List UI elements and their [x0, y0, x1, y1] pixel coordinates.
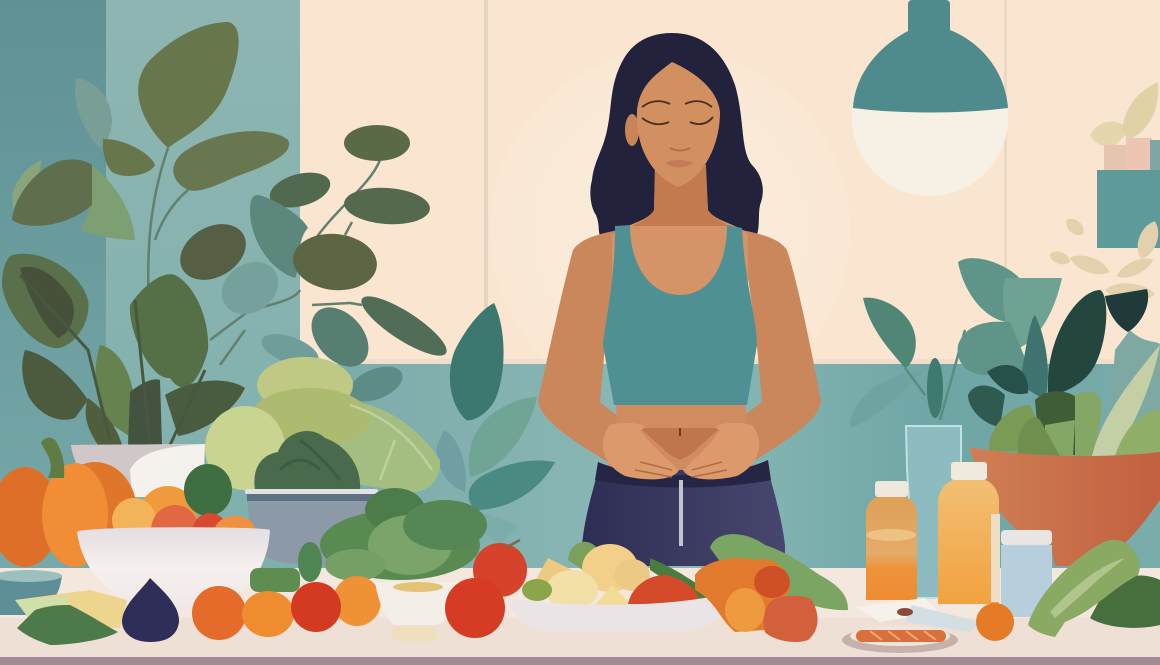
- plant: right foliage: [850, 258, 1160, 566]
- woman: [538, 33, 821, 566]
- small bowl: [375, 582, 462, 641]
- face: [637, 62, 720, 187]
- grey pot with broccoli: [245, 431, 378, 565]
- big olive leaf: [138, 22, 239, 148]
- leggings: [582, 470, 785, 566]
- pot: white with greens: [71, 444, 205, 497]
- small teal cup: [0, 570, 62, 615]
- hands: [603, 423, 679, 479]
- center greens: [250, 488, 487, 592]
- pumpkin: [0, 438, 137, 567]
- left olive leaf: [12, 159, 92, 226]
- bottle: small orange jar: [866, 481, 917, 600]
- cheese and herbs: [15, 590, 127, 645]
- waistband: [595, 460, 771, 488]
- tomatoes and oranges front-left: [192, 576, 381, 640]
- tank top: [603, 225, 757, 405]
- eyes and nose: [642, 101, 713, 124]
- pale leaves right: [1048, 215, 1160, 303]
- tomatoes center: [445, 540, 527, 638]
- neck and chest: [612, 160, 748, 310]
- bowl salad: [989, 345, 1160, 456]
- arms and shoulders: [538, 222, 665, 482]
- table: [0, 568, 1160, 665]
- mouth: [665, 160, 693, 168]
- vase: [906, 426, 961, 598]
- kale and peppers: [695, 534, 848, 642]
- navel: [679, 428, 681, 436]
- cabbage: [205, 357, 440, 493]
- zip: [679, 480, 683, 546]
- papers and pills: [855, 598, 980, 632]
- shelf with pale plant: [1090, 82, 1160, 248]
- jar: white and blue: [1001, 530, 1052, 617]
- bottle: large orange jar: [938, 462, 1000, 604]
- midriff: [606, 400, 755, 475]
- upper olive leaf: [173, 131, 289, 191]
- plant: teal leaves behind woman: [437, 303, 555, 545]
- right leafy greens: [1028, 540, 1160, 637]
- stem leaves: [250, 568, 300, 592]
- plant: dark bush left: [2, 254, 245, 445]
- lamp: [852, 0, 1008, 196]
- small olive leaf: [103, 139, 155, 176]
- plate with salmon: [842, 626, 958, 653]
- dark fig: [122, 578, 179, 642]
- pot: terracotta: [969, 447, 1160, 566]
- plate with vegetables: [508, 542, 730, 632]
- white bowl with fruit: [77, 464, 270, 610]
- hair: [590, 33, 763, 235]
- orange fruit: [976, 603, 1014, 641]
- pale ghost leaves: [12, 78, 135, 240]
- ear: [625, 114, 639, 146]
- plant: tall left foliage: [12, 22, 454, 408]
